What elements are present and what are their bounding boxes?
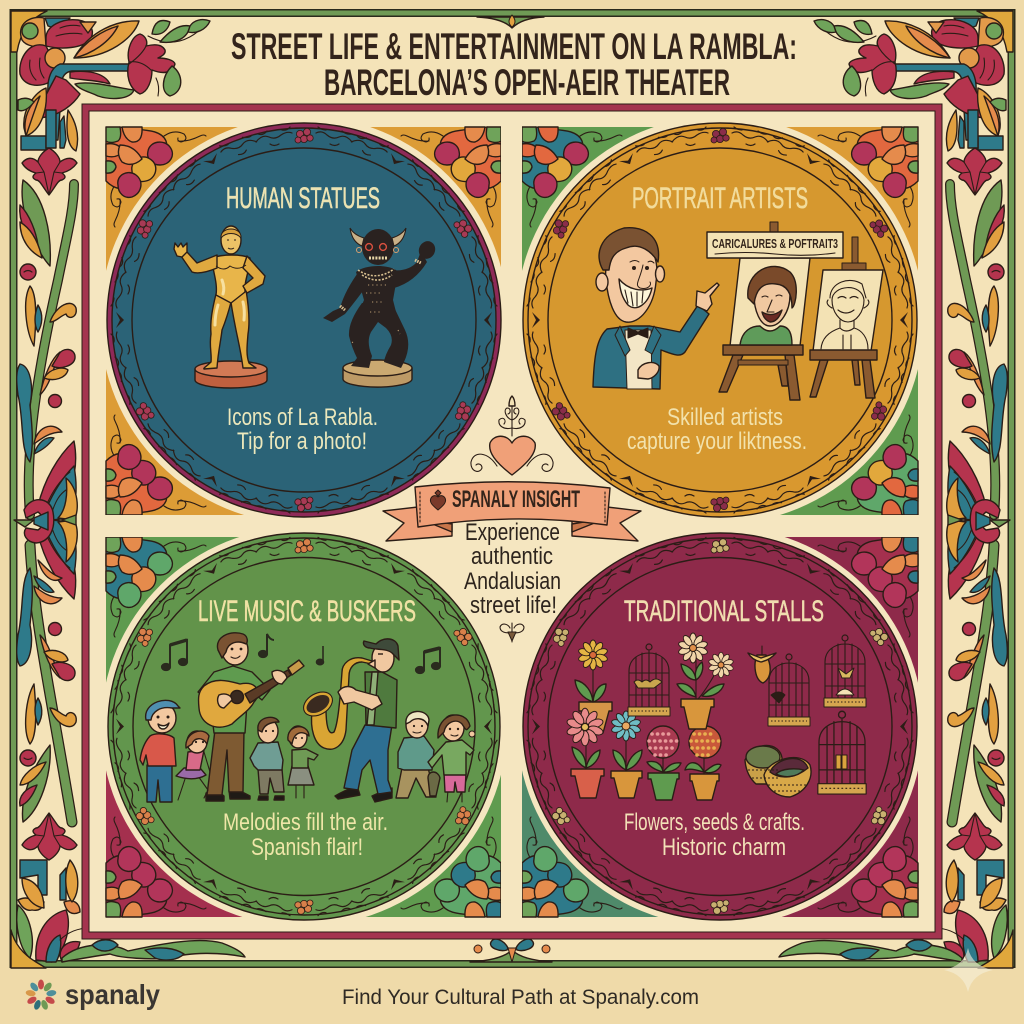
heading: LIVE MUSIC & BUSKERS <box>198 595 416 628</box>
floral border: top right corner <box>814 11 1013 195</box>
medallion: green circle <box>101 526 507 926</box>
banner: spanaly insight <box>383 482 641 541</box>
icon: potted flowers <box>566 633 734 800</box>
icon: pinwheel <box>25 980 57 1011</box>
caption <box>223 809 388 861</box>
figure: older man <box>396 711 436 798</box>
icon: seed bag <box>748 646 776 683</box>
medallion: gold circle <box>516 116 924 524</box>
banner text: SPANALY INSIGHT <box>452 486 580 513</box>
panel: portrait artists <box>516 116 924 524</box>
icon: music notes <box>161 634 441 674</box>
icon: gold statue <box>174 226 267 388</box>
icon: woven baskets <box>745 746 811 797</box>
figure: boy in blue cap <box>140 700 180 802</box>
title: BARCELONA’S OPEN-AEIR THEATER <box>324 62 730 103</box>
footer tagline: Find Your Cultural Path at Spanaly.com <box>342 985 699 1009</box>
floral border: bottom left corner <box>11 813 245 968</box>
floral border: left vine <box>14 180 77 822</box>
caption: Melodies fill the air. <box>223 809 388 836</box>
icon: sparkle <box>944 948 993 992</box>
insight text: authentic <box>471 543 553 570</box>
title <box>231 26 797 103</box>
figure: guitarist <box>198 633 304 801</box>
heading: TRADITIONAL STALLS <box>624 595 824 628</box>
footer logo <box>25 979 160 1011</box>
burgundy inner frame <box>86 108 938 936</box>
floral border: top left corner <box>11 11 210 195</box>
sign text: CARICALURES & POFTRAIT3 <box>712 237 838 251</box>
icon: heart <box>471 436 553 475</box>
caption: Tip for a photo! <box>237 428 367 455</box>
floral border: right vine <box>947 180 1010 822</box>
insight text: Andalusian <box>464 568 561 595</box>
caption <box>627 404 807 455</box>
floral border: bottom right corner <box>779 813 1013 968</box>
icon: small heart on banner <box>430 490 446 510</box>
panel: traditional stalls <box>517 526 923 926</box>
figure: girl in grey skirt <box>288 726 318 798</box>
medallion: teal circle <box>100 116 508 524</box>
panel: human statues <box>100 116 508 524</box>
insight text <box>464 519 561 619</box>
icon: fleur ornament above heart <box>499 396 525 436</box>
figure: girl in pink <box>176 731 210 800</box>
caption: Skilled artists <box>667 404 783 431</box>
caption: Flowers, seeds & crafts. <box>624 809 805 836</box>
caption <box>624 809 805 861</box>
caption: Spanish flair! <box>251 834 363 861</box>
brand name: spanaly <box>65 979 160 1010</box>
heading: HUMAN STATUES <box>226 182 380 215</box>
heading: PORTRAIT ARTISTS <box>632 182 808 215</box>
illustration: smiling artist <box>593 228 719 389</box>
caption: Historic charm <box>662 834 786 861</box>
illustration: easels with sign <box>707 222 883 400</box>
figure: boy in teal <box>250 717 284 800</box>
caption <box>227 404 378 455</box>
medallion: burgundy circle <box>517 526 923 926</box>
insight text: Experience <box>465 519 560 546</box>
figure: saxophonist <box>299 639 399 802</box>
icon: dark demon statue <box>323 228 438 387</box>
panel: live music and buskers <box>101 526 507 926</box>
corner panels with florals <box>100 120 925 930</box>
figure: woman with basket <box>428 715 475 802</box>
center insight callout <box>383 396 641 642</box>
icon: small ornament below text <box>500 623 524 642</box>
insight text: street life! <box>470 592 557 619</box>
caption: capture your liktness. <box>627 428 807 455</box>
icon: bird cages <box>628 635 866 794</box>
caption: Icons of La Rabla. <box>227 404 378 431</box>
